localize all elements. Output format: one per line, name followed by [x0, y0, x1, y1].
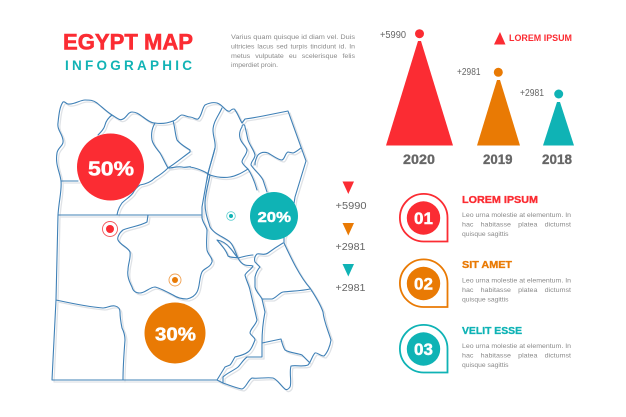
intro text block: ultricies lacus sed turpis tincidunt id. In	[231, 44, 355, 50]
map of Egypt	[52, 100, 333, 392]
cone chart	[380, 29, 574, 167]
title: EGYPT MAP	[63, 30, 193, 54]
cone: 2019: +2981	[457, 67, 481, 78]
pin 01	[400, 194, 448, 242]
cone: 2020	[380, 29, 453, 167]
legend: down triangles with values: +5990	[336, 201, 367, 212]
title	[63, 30, 193, 73]
item 01	[400, 194, 571, 242]
pin 02	[400, 259, 448, 307]
pin 02: 02	[414, 274, 433, 294]
item 02	[400, 259, 571, 307]
item 03: hac habitasse platea dictumst	[462, 352, 571, 360]
map outlines	[52, 100, 331, 390]
cone: 2020: +5990	[380, 30, 406, 41]
cone: 2018: +2981	[520, 88, 544, 99]
map shadow	[54, 102, 333, 392]
title: INFOGRAPHIC	[65, 58, 192, 73]
pin 03	[400, 325, 448, 372]
item 01: LOREM IPSUM	[462, 194, 538, 206]
map marker: red	[102, 222, 118, 236]
cone: 2018	[520, 88, 574, 167]
map bubble: 30%	[144, 302, 206, 364]
intro text block: metus vulputate eu scelerisque felis	[231, 53, 356, 60]
chart legend	[494, 32, 572, 44]
item 03: quisque sagittis	[462, 362, 509, 369]
map bubble: 50%	[77, 134, 144, 200]
chart legend: LOREM IPSUM	[509, 33, 572, 43]
legend: down triangles with values: +2981	[336, 283, 366, 294]
map bubble: 20%	[250, 192, 298, 240]
cone: 2020: 2020	[403, 152, 435, 167]
map marker: teal	[227, 212, 235, 220]
intro text block: imperdiet proin.	[231, 62, 278, 69]
intro text block	[231, 34, 356, 69]
map bubble: 20%: 20%	[258, 209, 291, 226]
item 02: SIT AMET	[462, 259, 513, 271]
map marker: orange	[169, 274, 181, 286]
item 03: Leo urna molestie at elementum. In	[462, 343, 571, 350]
item 01: quisque sagittis	[462, 231, 509, 238]
item 03: VELIT ESSE	[462, 325, 522, 337]
intro text block: Varius quam quisque id diam vel. Duis	[231, 34, 356, 41]
map bubble: 50%: 50%	[88, 158, 134, 180]
pin 03: 03	[414, 340, 433, 359]
cone: 2019: 2019	[483, 152, 512, 167]
item 02: quisque sagittis	[462, 296, 509, 304]
map bubble: 30%: 30%	[155, 324, 196, 344]
item 02: hac habitasse platea dictumst	[462, 287, 571, 294]
item 03	[400, 325, 571, 372]
item 01: Leo urna molestie at elementum. In	[462, 212, 571, 219]
pin 01: 01	[414, 209, 433, 228]
cone: 2019	[457, 67, 520, 167]
legend: down triangles with values	[336, 182, 367, 294]
item 01: hac habitasse platea dictumst	[462, 222, 571, 228]
item 02: Leo urna molestie at elementum. In	[462, 278, 571, 284]
legend: down triangles with values: +2981	[336, 242, 366, 253]
cone: 2018: 2018	[542, 152, 572, 167]
